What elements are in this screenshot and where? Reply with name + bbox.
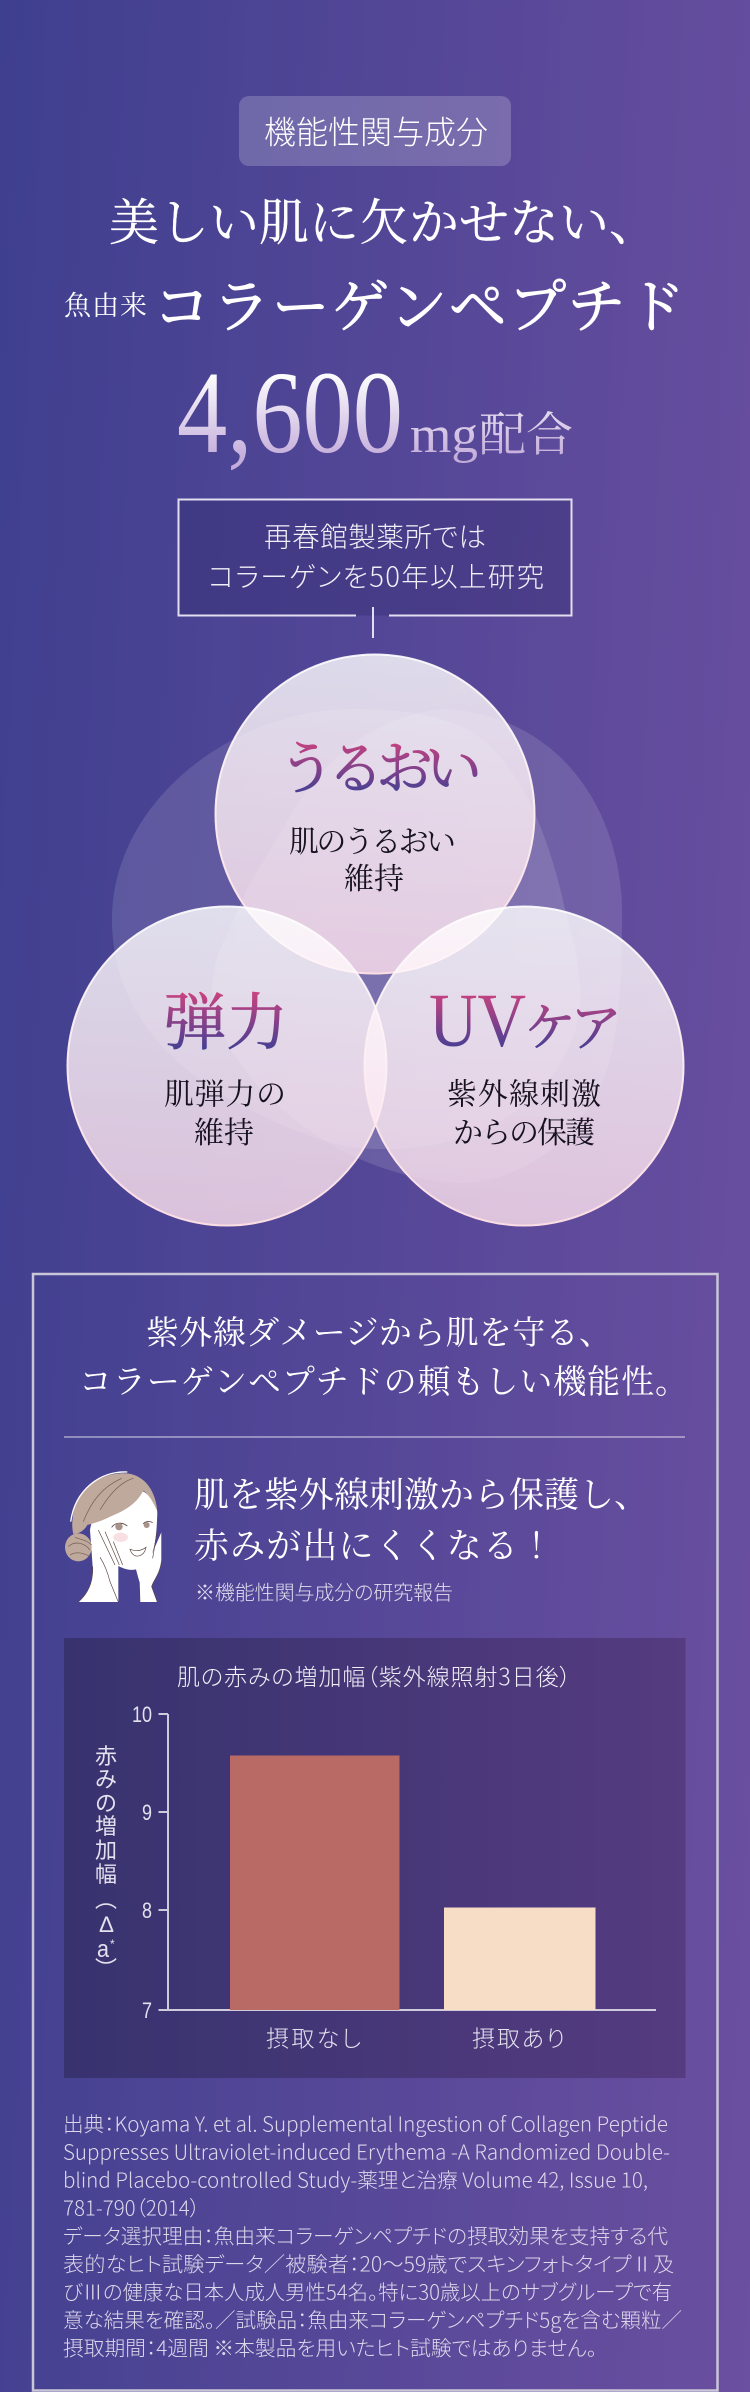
y axis label: * [110, 1937, 115, 1951]
circle heading: うるおい: うるおい [278, 723, 482, 805]
amount: 4,600mg配合: mg [410, 407, 478, 464]
y axis label: Δ [99, 1912, 114, 1937]
y axis label: ） [90, 1957, 122, 1979]
lead text: 肌を紫外線刺激から保護し: 赤みが出にくくなる！ [194, 1519, 554, 1569]
y axis label: 増 [95, 1809, 117, 1841]
circle heading: UVケア: UV [429, 979, 526, 1063]
y axis label: 加 [95, 1833, 117, 1865]
badge: 機能性関与成分 [239, 96, 511, 166]
chart title: 肌の赤みの増加幅（紫外線照射3日後） [177, 1658, 571, 1692]
section heading [79, 1307, 688, 1403]
connector line [372, 607, 374, 638]
heading: 魚由来コラーゲンペプチド: 魚由来 [64, 284, 147, 323]
panel: UVケア circle [364, 906, 684, 1226]
y axis label: の [95, 1786, 117, 1818]
source and footnote text: データ選択理由：魚由来コラーゲンペプチドの摂取効果を支持する代 [63, 2220, 668, 2250]
y axis label: 赤 [95, 1739, 117, 1771]
amount: 4,600mg配合: 配合 [479, 398, 573, 465]
circle text: 紫外線刺激からの保護: からの保護 [453, 1108, 595, 1152]
y axis label: み [95, 1762, 117, 1794]
section heading: コラーゲンペプチドの頼もしい機能性。 [79, 1356, 688, 1403]
y axis: 10 [132, 1702, 152, 1727]
circle text: 肌のうるおい維持: 維持 [344, 854, 404, 898]
source and footnote text [63, 2108, 682, 2362]
circle text: 肌のうるおい維持: 肌のうるおい [289, 817, 456, 861]
y axis: 7 [142, 1998, 152, 2023]
icon: woman touching her cheeks [65, 1472, 162, 1602]
heading: 魚由来コラーゲンペプチド: コラーゲンペプチド [153, 260, 685, 344]
translucent background blobs [112, 709, 622, 1183]
y axis label: a [97, 1936, 110, 1963]
bar: 摂取なし [230, 1756, 400, 2010]
source and footnote text: 摂取期間：4週間 ※本製品を用いたヒト試験ではありません。 [63, 2332, 597, 2362]
circle heading: UVケア [429, 979, 622, 1063]
circle text: 肌弾力の維持 [164, 1070, 286, 1152]
y axis label [90, 1739, 122, 1979]
source and footnote text: 意な結果を確認。／試験品：魚由来コラーゲンペプチド5gを含む顆粒／ [63, 2304, 682, 2334]
circle text: 紫外線刺激からの保護: 紫外線刺激 [447, 1070, 601, 1114]
bar chart: redness increase [64, 1638, 686, 2078]
source and footnote text: 781-790（2014） [63, 2192, 200, 2222]
y axis: 8 [142, 1898, 152, 1923]
callout box: 50年以上研究: 再春館製薬所では [264, 514, 486, 554]
panel: うるおい circle [216, 654, 534, 974]
source and footnote text: Suppresses Ultraviolet-induced Erythema -A Randomized Double- [63, 2136, 670, 2166]
circle heading: 弾力: 弾力 [164, 973, 288, 1062]
category labels [266, 2020, 565, 2054]
bar: 摂取あり [444, 1908, 596, 2010]
lead text: 肌を紫外線刺激から保護し [194, 1468, 649, 1569]
y axis label: （ [90, 1888, 122, 1910]
y axis: 9 [142, 1800, 152, 1825]
category labels: 摂取なし [266, 2020, 361, 2054]
note: research report: ※機能性関与成分の研究報告 [195, 1576, 453, 1606]
circle text: 紫外線刺激からの保護 [447, 1070, 601, 1152]
y axis label: 幅 [95, 1857, 117, 1889]
source and footnote text: 出典：Koyama Y. et al. Supplemental Ingestion of Collagen Peptide [63, 2108, 668, 2138]
title: 美しい肌に欠かせない、: 美しい肌に欠かせない、 [109, 183, 659, 255]
amount: 4,600mg配合: 4,600 [177, 347, 403, 478]
panel: UV protection evidence [33, 1274, 718, 2390]
source and footnote text: 表的なヒト試験データ／被験者：20～59歳でスキンフォトタイプⅡ及 [63, 2248, 674, 2278]
lead text: 肌を紫外線刺激から保護し: 肌を紫外線刺激から保護し、 [194, 1468, 649, 1518]
source and footnote text: blind Placebo-controlled Study-薬理と治療 Volume 42, Issue 10, [63, 2164, 648, 2194]
circle text: 肌のうるおい維持 [289, 817, 456, 898]
callout box: 50年以上研究 [178, 500, 572, 616]
category labels: 摂取あり [472, 2020, 565, 2054]
circle text: 肌弾力の維持: 維持 [194, 1108, 254, 1152]
y axis [132, 1702, 656, 2023]
circle heading: UVケア: ケア [524, 986, 622, 1061]
section heading: 紫外線ダメージから肌を守る、 [146, 1307, 612, 1354]
badge: 機能性関与成分: 機能性関与成分 [264, 108, 488, 154]
circle text: 肌弾力の維持: 肌弾力の [164, 1070, 286, 1114]
panel: 弾力 circle [68, 906, 386, 1226]
source and footnote text: びⅢの健康な日本人成人男性54名。特に30歳以上のサブグループで有 [63, 2276, 672, 2306]
amount: 4,600mg配合 [177, 347, 573, 478]
callout box: 50年以上研究: コラーゲンを50年以上研究 [208, 554, 544, 594]
